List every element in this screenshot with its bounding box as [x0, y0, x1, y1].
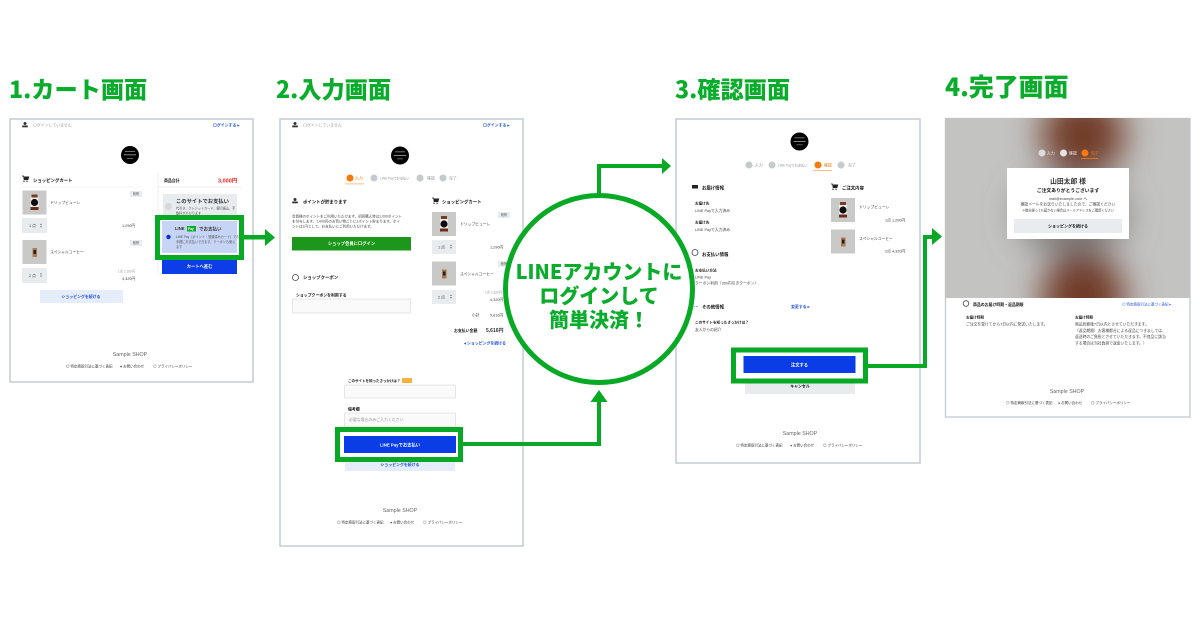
progress steps: 完了: [1091, 150, 1099, 156]
cart list: 削除: [133, 191, 140, 196]
delivery info: LINE Payで入力済み: [695, 208, 730, 213]
checkout button: カートへ進む: [187, 263, 213, 270]
footer: ◎ 特定商取引法に基づく表記: [337, 520, 384, 524]
points notice: ントは1円として、お支払いにご利用いただけます。: [292, 224, 374, 228]
progress steps: 入力: [1047, 150, 1055, 156]
coupon section: ショップクーポン: [303, 274, 339, 281]
delivery and returns info: ご注文を受けてから7日以内に発送いたします。: [966, 322, 1047, 326]
login status: [22, 122, 240, 128]
heading: step 2 input screen: 2.入力画面: [276, 71, 391, 105]
payment info: クーポン利用（300円引きクーポン）: [695, 280, 758, 286]
footer: ● お問い合わせ: [120, 364, 145, 368]
arrow head right: [932, 228, 942, 245]
footer: ◎ プライバシーポリシー: [823, 442, 863, 448]
cart list: スペシャルコーヒー: [50, 250, 84, 254]
coupon section: ショップクーポンを利用する: [296, 292, 347, 298]
order contents: ご注文内容: [842, 184, 865, 192]
order contents: [831, 184, 905, 254]
arrow: step 2 to callout: [463, 400, 599, 444]
progress steps: 完了: [848, 162, 856, 168]
thank you card: mail@example.com へ: [1049, 197, 1087, 201]
points notice: [292, 198, 402, 228]
heading: step 4 completion screen: 4.完了画面: [945, 68, 1068, 104]
footer: Sample SHOP: [383, 508, 418, 514]
checkout button: [162, 258, 237, 274]
delivery and returns info: （返品期限）お客様都合による返品につきましては、: [1075, 328, 1166, 333]
highlight: LINE Pay button: LINE Payでお支払い: [380, 442, 421, 448]
login status: [292, 122, 510, 128]
cart summary: 1点 2,160円: [485, 290, 502, 294]
background photo: [945, 118, 1190, 298]
progress steps: 入力: [755, 162, 763, 168]
delivery info: [692, 184, 730, 232]
cart list: 1 点: [29, 223, 36, 228]
cart summary: 1,290円: [490, 246, 504, 250]
delivery info: お届け先: [695, 220, 710, 224]
footer: [1006, 389, 1131, 405]
cart list: 2 点: [29, 273, 36, 278]
footer: Sample SHOP: [113, 352, 148, 358]
callout: LINE account quick checkout: [506, 196, 692, 382]
cart list: 1点 2,160円: [118, 268, 135, 274]
delivery and returns info: 商品のお届け時期・返品期限: [973, 302, 1024, 307]
points notice: ポイントが貯まります: [303, 198, 348, 206]
login status: ログインしていません: [33, 122, 72, 128]
login status: ログインする ▸: [213, 122, 240, 128]
progress steps: 確認: [427, 176, 435, 180]
other info: 変更する ▸: [791, 304, 811, 309]
cart summary: 削除: [501, 261, 508, 266]
panel: cart screen: [10, 119, 253, 382]
cart summary: 1 点: [438, 244, 445, 250]
cart summary: 5,616円: [490, 314, 504, 318]
progress steps: LINE Payでお支払い: [380, 176, 409, 180]
LINE Pay option: [162, 221, 240, 253]
callout: LINE account quick checkout: ログインして: [539, 280, 659, 309]
arrow: callout to step 3: [599, 166, 663, 195]
thank you card: ご注文ありがとうございます: [1037, 187, 1099, 194]
login status: ログインしていません: [303, 122, 342, 128]
progress steps: LINE Payでお支払い: [778, 162, 807, 168]
panel: confirmation screen: [676, 119, 920, 463]
cart summary: 小計: [472, 312, 480, 318]
delivery and returns info: [963, 301, 1171, 346]
delivery info: LINE Payで入力済み: [695, 227, 730, 232]
payment info: お支払い情報: [702, 251, 729, 258]
thank you card: 確認メールをお送りいたしましたので、ご確認ください: [1021, 202, 1116, 206]
order contents: スペシャルコーヒー: [859, 236, 893, 241]
LINE Pay option: LINE Pay（ポイント・登録済みカード）でお: [176, 234, 240, 239]
cancel button: キャンセル: [790, 384, 810, 388]
payment info: [692, 250, 758, 286]
callout: LINE account quick checkout: 簡単決済！: [549, 304, 649, 333]
footer: ◎ 特定商取引法に基づく表記: [1006, 400, 1053, 405]
pay on this site option: 数料がかかります: [176, 210, 201, 216]
other info: その他情報: [702, 304, 725, 310]
cart summary: [432, 198, 510, 346]
progress steps: 確認: [1069, 150, 1077, 156]
footer: ◎ プライバシーポリシー: [423, 520, 463, 524]
order summary: [158, 173, 241, 275]
other info: ⋯: [694, 304, 699, 309]
order contents: 1点 1,290円: [885, 218, 905, 222]
cart summary: 5,616円: [486, 328, 504, 334]
footer: Sample SHOP: [1050, 389, 1085, 395]
LINE Pay option: ます: [176, 244, 182, 249]
shop logo: [391, 146, 409, 164]
shop logo: [121, 146, 139, 164]
thank you card: ショッピングを続ける: [1048, 222, 1088, 228]
cancel button: [745, 380, 855, 394]
continue shopping button: ショッピングを続ける: [62, 294, 101, 299]
delivery and returns info: ◎ 特定商取引法に基づく表記 ▸: [1122, 302, 1171, 306]
heading: step 3 confirmation screen: 3.確認画面: [675, 71, 790, 105]
delivery info: お届け情報: [702, 184, 725, 192]
footer: ● お問い合わせ: [1058, 400, 1083, 405]
survey form: このサイトを知ったきっかけは？: [348, 378, 400, 383]
cart summary: スペシャルコーヒー: [460, 272, 494, 276]
footer: ◎ 特定商取引法に基づく表記: [736, 442, 783, 448]
cart summary: ◂ ショッピングを続ける: [463, 340, 506, 346]
coupon section: [292, 274, 410, 313]
arrow head right to step 3: [662, 158, 671, 174]
footer: ◎ プライバシーポリシー: [1091, 400, 1131, 405]
other info: このサイトを知ったきっかけは？: [695, 320, 749, 324]
pay on this site option: 代引き、クレジットカード、銀行振込、手: [176, 206, 235, 210]
continue shopping button: [40, 290, 123, 303]
thank you card: 山田太郎 様: [1050, 176, 1086, 186]
delivery and returns info: お届け時期: [1075, 314, 1093, 320]
footer: ● お問い合わせ: [390, 520, 415, 524]
progress steps: 完了: [449, 176, 457, 180]
survey form: [344, 378, 456, 427]
delivery and returns info: 返送時のご負担とさせていただきます。不良品に該当: [1075, 334, 1166, 339]
footer: ◎ 特定商取引法に基づく表記: [66, 364, 113, 368]
cart summary: ショッピングカート: [442, 198, 482, 206]
LINE Pay option: 手軽にお支払いできます。クーポンも使え: [176, 239, 235, 244]
other info: 友人からの紹介: [695, 327, 722, 332]
progress steps: 確認: [824, 162, 832, 168]
login status: ログインする ▸: [483, 122, 510, 128]
cart list: [20, 176, 142, 283]
delivery and returns info: 商品到着後7日以内とさせていただきます。: [1075, 322, 1149, 326]
cart list: 削除: [133, 240, 140, 245]
highlight: confirm order button: 注文する: [791, 362, 808, 368]
pay on this site option: [163, 194, 237, 220]
arrow head up: [590, 390, 608, 402]
delivery and returns info: お届け時期: [966, 314, 984, 320]
highlight: confirm order button: [734, 350, 866, 381]
callout: LINE account quick checkout: LINEアカウントに: [516, 256, 682, 285]
heading: step 1 cart screen: 1.カート画面: [9, 71, 147, 105]
LINE Pay option: でお支払い: [199, 226, 222, 232]
payment info: お支払い方法: [695, 268, 717, 272]
order contents: ドリップビューレ: [859, 204, 890, 210]
panel: completion screen: [945, 93, 1190, 417]
highlight: LINE Pay option: [158, 218, 242, 258]
cart summary: 削除: [501, 212, 508, 217]
order summary: 商品合計: [164, 178, 180, 183]
footer: ● お問い合わせ: [790, 442, 815, 448]
cart list: 1,290円: [122, 224, 136, 228]
pay on this site option: このサイトでお支払い: [176, 197, 229, 205]
cart list: ドリップビューレ: [50, 200, 81, 205]
footer: Sample SHOP: [783, 431, 818, 437]
progress steps: [746, 162, 856, 171]
continue shopping button: [345, 460, 455, 471]
panel: input screen: [280, 119, 523, 546]
thank you card: ※数分経っても届かない場合はメールアドレスをご確認ください: [1022, 208, 1114, 212]
shop logo: [790, 132, 808, 150]
progress steps: [1038, 150, 1099, 159]
cart summary: ドリップビューレ: [460, 222, 491, 226]
continue shopping button: ショッピングを続ける: [381, 462, 420, 467]
progress steps: 入力: [355, 176, 363, 180]
arrow: step 1 to step 2: [243, 229, 275, 246]
arrow: step 3 to step 4: [868, 237, 933, 366]
survey form: 必要な場合のみご入力ください: [349, 417, 404, 422]
footer: [337, 508, 463, 524]
payment info: LINE Pay: [695, 276, 711, 280]
LINE Pay option: LINE: [175, 226, 185, 231]
footer: ◎ プライバシーポリシー: [153, 364, 193, 368]
delivery and returns info: する場合は当社負担で返金いたします。）: [1075, 340, 1147, 346]
highlight: LINE Pay button: [338, 430, 460, 460]
shop member login button: [292, 237, 411, 250]
footer: [736, 431, 863, 448]
cart list: ショッピングカート: [33, 177, 73, 184]
cart list: 4,320円: [122, 277, 136, 281]
LINE Pay option: Pay: [188, 227, 194, 231]
thank you card: [1007, 168, 1129, 239]
points notice: 会員様のポイントをご利用いただけます。初回購入時は1,000ポイント: [292, 214, 402, 218]
cart summary: お支払い金額: [454, 328, 477, 333]
cart summary: 4,320円: [490, 298, 504, 302]
shop member login button: ショップ会員にログイン: [328, 240, 376, 247]
cart summary: 2 点: [438, 294, 445, 300]
order contents: 2点 4,320円: [885, 248, 905, 254]
order summary: 3,000円: [218, 178, 238, 184]
delivery info: お届け先: [695, 200, 710, 206]
progress steps: [345, 174, 457, 184]
other info: [694, 304, 811, 332]
points notice: を付与します。1,000円のお買い物ごとに1ポイント貯まります。ポイ: [292, 218, 400, 224]
survey form: 備考欄: [348, 406, 360, 412]
footer: [66, 352, 193, 368]
